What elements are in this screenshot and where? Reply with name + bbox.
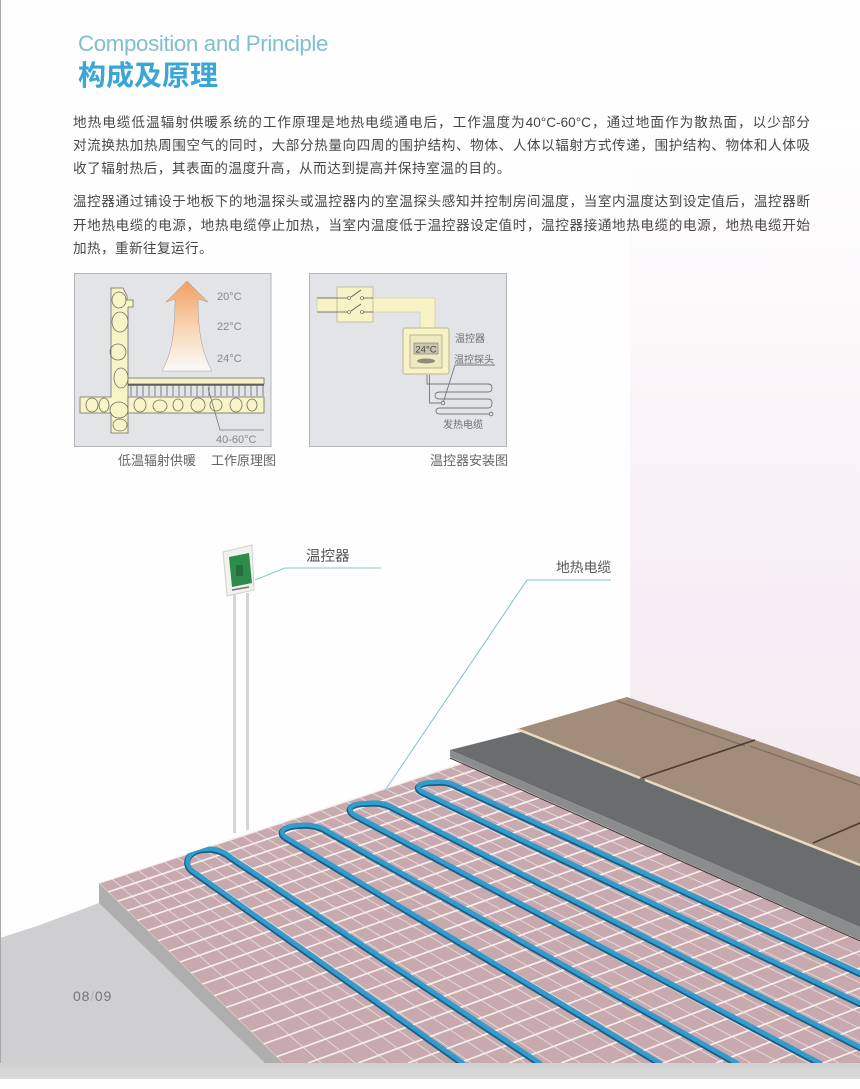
paragraph two xyxy=(73,194,810,256)
cream conduit xyxy=(317,298,435,328)
pink back wall xyxy=(630,120,860,800)
page number: 08/09 xyxy=(73,988,112,1004)
thermostat leader line xyxy=(255,568,381,580)
thermostat device xyxy=(223,545,254,596)
page left edge xyxy=(0,0,1,1063)
heating cable ticks xyxy=(128,385,264,396)
paragraph two: 开地热电缆的电源，地热电缆停止加热，当室内温度低于温控器设定值时，温控器接通地热电缆的电源，地热电缆开始 xyxy=(73,218,810,233)
temperature labels: 40-60°C xyxy=(216,434,257,446)
heating cables xyxy=(187,782,860,1064)
switch box xyxy=(317,287,373,322)
panel: thermostat installation diagram xyxy=(309,273,507,447)
temperature leader line xyxy=(208,388,264,430)
paragraph one: 地热电缆低温辐射供暖系统的工作原理是地热电缆通电后，工作温度为40°C-60°C，通过地面作为散热面，以少部分 xyxy=(73,115,810,130)
thermostat diagram labels: 发热电缆 xyxy=(443,418,483,431)
heating cable leader line xyxy=(384,580,611,792)
grey screed slab xyxy=(450,722,860,941)
caption: radiant heating diagram: 低温辐射供暖 工作原理图 xyxy=(118,453,276,468)
thermostat diagram labels: 温控器 xyxy=(455,332,485,345)
paragraph one xyxy=(73,115,810,176)
paragraph one: 对流换热加热周围空气的同时，大部分热量向四周的围护结构、物体、人体以辐射方式传递，围护结构、物体和人体吸 xyxy=(73,138,810,153)
grey concrete floor xyxy=(0,903,270,1063)
temperature labels: 24°C xyxy=(217,353,242,365)
paragraph two: 加热，重新往复运行。 xyxy=(73,241,213,256)
thermostat diagram labels: 温控探头 xyxy=(454,353,494,366)
floor tiles xyxy=(517,697,860,865)
chinese title: 构成及原理 xyxy=(78,60,218,91)
bottom page strip xyxy=(0,1063,860,1079)
caption: thermostat diagram: 温控器安装图 xyxy=(430,453,508,468)
paragraph two: 温控器通过铺设于地板下的地温探头或温控器内的室温探头感知并控制房间温度，当室内温度达到设定值后，温控器断 xyxy=(73,194,810,209)
temperature labels: 20°C xyxy=(217,291,242,303)
cable wiring xyxy=(427,365,495,416)
paragraph one: 收了辐射热后，其表面的温度升高，从而达到提高并保持室温的目的。 xyxy=(73,161,511,176)
temperature labels: 22°C xyxy=(217,321,242,333)
insulation mat side edge xyxy=(99,883,283,1063)
label: thermostat: 温控器 xyxy=(306,549,350,565)
heat rising arrow xyxy=(162,281,212,371)
wall and floor section xyxy=(80,288,264,433)
thermostat diagram labels xyxy=(443,332,494,431)
english title: Composition and Principle xyxy=(78,31,328,56)
label: heating cable: 地热电缆 xyxy=(556,560,611,575)
thermostat unit xyxy=(403,328,449,374)
temperature labels xyxy=(216,291,257,446)
panel: low-temperature radiant heating diagram xyxy=(74,273,272,447)
heating mat with mesh grid xyxy=(99,762,860,1063)
thermostat unit: 24°C xyxy=(415,344,437,356)
thermostat support poles xyxy=(234,593,248,833)
